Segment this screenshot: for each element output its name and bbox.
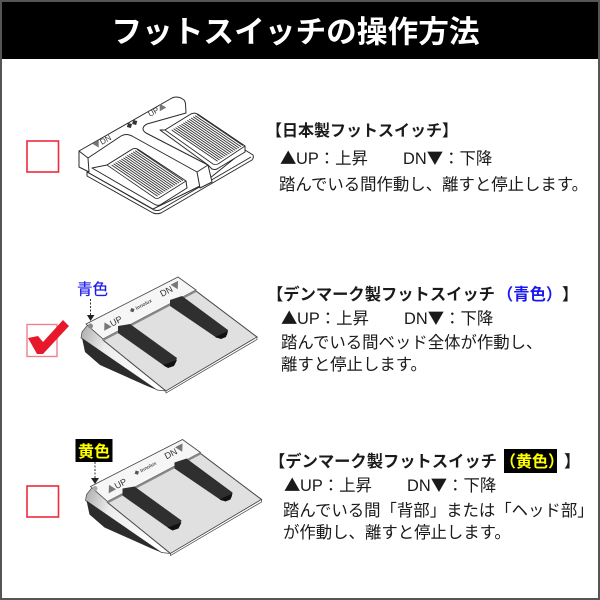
icon: red check mark [28, 320, 69, 354]
switch labels: UP, logo, DN: ▲UP [99, 312, 124, 334]
switch labels: UP, logo, DN [104, 440, 187, 496]
illustration: white foot switch [79, 97, 253, 214]
description: 離すと停止します。 [281, 356, 427, 374]
label: yellow: 黄色 [78, 442, 110, 461]
checkbox: empty [27, 141, 58, 172]
operation line: UP and DN: UP：上昇 [296, 150, 368, 168]
heading: Denmark-made yellow [269, 449, 580, 473]
arrow: to yellow indicator [91, 462, 99, 484]
checkbox: checked [27, 324, 57, 356]
heading: Denmark-made blue: 【デンマーク製フットスイッチ [267, 285, 495, 304]
heading: Japanese-made: 【日本製フットスイッチ】 [266, 122, 458, 140]
heading: Denmark-made yellow: 【デンマーク製フットスイッチ [269, 452, 497, 471]
heading: Denmark-made blue: （青色） [497, 285, 562, 304]
switch labels: UP, logo, DN: ◆ Innolux [129, 298, 153, 315]
switch labels: UP, logo, DN: DN▼ [162, 440, 187, 462]
heading: Denmark-made yellow: 】 [564, 453, 580, 471]
checkbox: empty [27, 486, 58, 517]
switch labels: UP, logo, DN: DN▼ [157, 278, 183, 300]
operation line: UP and DN: DN [404, 310, 428, 328]
switch labels: DN, logo, UP [91, 101, 168, 152]
description [283, 502, 594, 542]
illustration: blue-indicator foot switch [81, 277, 257, 393]
operation line: UP and DN: ▲ [281, 305, 297, 329]
operation line: UP and DN: ▼：下降 [427, 145, 492, 169]
switch labels: DN, logo, UP: UP▲ [146, 101, 168, 120]
operation line: UP and DN: ▼：下降 [428, 305, 493, 329]
label: yellow [76, 439, 112, 462]
heading: Denmark-made yellow: （黄色） [500, 452, 564, 471]
operation line: UP and DN: UP：上昇 [297, 310, 369, 328]
title banner: フットスイッチの操作方法 [111, 14, 480, 50]
switch labels: UP, logo, DN: ▲UP [104, 475, 129, 496]
arrow: to blue indicator [87, 299, 94, 321]
option 1: Japanese-made foot switch [27, 97, 588, 214]
illustration: yellow-indicator foot switch [86, 440, 262, 556]
description [281, 334, 542, 374]
operation line: UP and DN: ▲ [284, 472, 300, 496]
operation line: UP and DN: DN [403, 150, 427, 168]
title banner [0, 0, 600, 59]
description: 踏んでいる間「背部」または「ヘッド部」 [283, 502, 594, 520]
operation line: UP and DN: ▲ [280, 145, 296, 169]
option 2: Denmark-made blue switch [27, 277, 578, 393]
description: 踏んでいる間ベッド全体が作動し、 [281, 334, 542, 352]
switch labels: DN, logo, UP: ▼DN [91, 132, 114, 152]
heading: Denmark-made blue: 】 [562, 286, 578, 304]
operation line: UP and DN: UP：上昇 [300, 477, 372, 495]
description: が作動し、離すと停止します。 [283, 524, 511, 542]
switch labels: UP, logo, DN [99, 278, 183, 334]
switch labels: UP, logo, DN: ◆ Innolux [134, 461, 158, 477]
label: blue: 青色 [77, 280, 108, 298]
option 3: Denmark-made yellow switch [27, 439, 594, 556]
operation line: UP and DN: ▼：下降 [431, 472, 496, 496]
operation line: UP and DN: DN [407, 477, 431, 495]
switch labels: DN, logo, UP: ◆◆ [126, 119, 139, 131]
description: 踏んでいる間作動し、離すと停止します。 [279, 176, 588, 194]
